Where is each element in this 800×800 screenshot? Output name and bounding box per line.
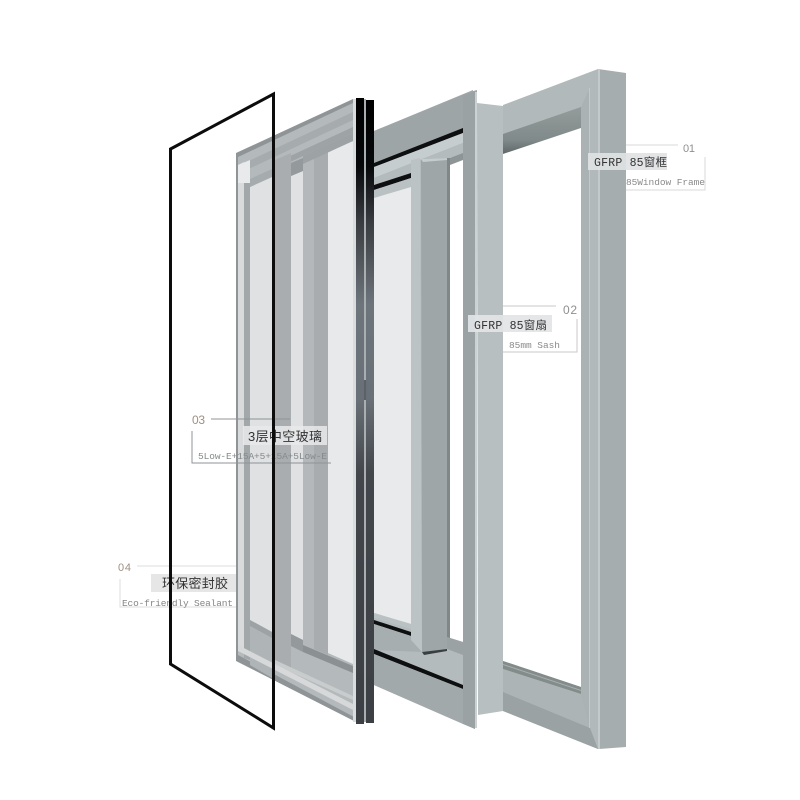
sash inner face xyxy=(374,143,463,687)
sash side face xyxy=(477,103,503,715)
glass top band xyxy=(238,112,353,174)
leader lines 02 xyxy=(503,306,577,352)
title text 02: GFRP 85窗扇 xyxy=(474,318,547,333)
frame bottom sill xyxy=(503,661,581,694)
frame top soffit xyxy=(503,107,581,154)
sash lower slot xyxy=(374,649,463,689)
frame opening xyxy=(503,128,581,687)
label 02: sash xyxy=(468,303,577,352)
highlighted title 02 xyxy=(468,315,552,332)
glass stile 2 xyxy=(303,151,314,650)
leader lines 03 xyxy=(192,419,331,463)
spacer: metal edge between glass panes xyxy=(353,98,374,724)
highlighted title 01 xyxy=(588,153,667,170)
subtitle 03: 5Low-E+15A+5+15A+5Low-E xyxy=(198,451,327,462)
glass panel 2 xyxy=(291,171,303,640)
leader lines 01 xyxy=(626,145,705,190)
title text 01: GFRP 85窗框 xyxy=(594,155,668,170)
glass panel 3 xyxy=(328,141,353,664)
subtitle 01: 85Window Frame xyxy=(626,177,705,188)
frame: GFRP 85 window frame xyxy=(503,69,626,749)
label 01: window frame xyxy=(588,143,705,190)
glass bottom rail xyxy=(303,645,353,673)
label 04: sealant xyxy=(118,562,236,609)
highlighted title 04 xyxy=(151,574,236,592)
sash front face xyxy=(374,90,475,729)
sash: GFRP 85 window sash xyxy=(374,90,503,729)
frame side face xyxy=(598,69,626,749)
glass base xyxy=(236,99,356,722)
number 04: 04 xyxy=(118,562,131,574)
title text 04: 环保密封胶 xyxy=(162,576,228,591)
subtitle 04: Eco-friendly Sealant xyxy=(122,598,233,609)
number 03: 03 xyxy=(192,413,205,427)
frame front face xyxy=(503,69,598,749)
highlighted title 03 xyxy=(243,426,327,445)
glass panel 1 xyxy=(250,177,272,632)
glass: triple-layer insulated glass unit xyxy=(236,99,356,722)
sash right opening xyxy=(450,155,463,642)
glass left strip xyxy=(238,162,244,650)
sealant: black gasket outline xyxy=(170,94,274,728)
subtitle 02: 85mm Sash xyxy=(509,340,560,351)
number 02: 02 xyxy=(563,303,577,317)
sash left pane xyxy=(374,173,411,190)
label 03: insulated glass xyxy=(192,413,331,463)
number 01: 01 xyxy=(683,143,695,155)
leader lines 04 xyxy=(120,566,236,607)
sash top soffit xyxy=(374,95,463,163)
title text 03: 3层中空玻璃 xyxy=(248,429,322,444)
frame jamb edge xyxy=(589,88,590,728)
glass stile 1 xyxy=(275,153,291,668)
sash mullion xyxy=(411,158,422,652)
